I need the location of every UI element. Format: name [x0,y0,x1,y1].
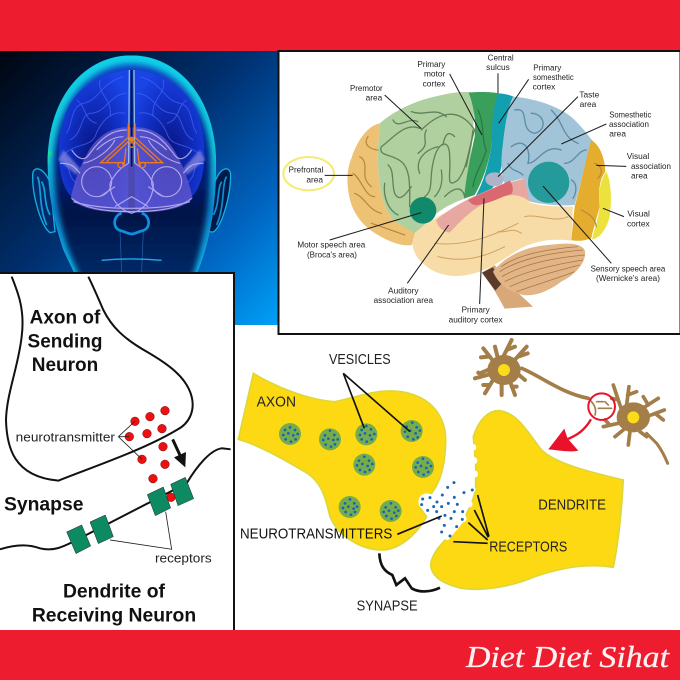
brain labels: Auditory [388,285,419,295]
receptors label and pointers: receptors [155,552,212,566]
nose [115,213,149,234]
brain labels: cortex [423,78,446,88]
yellow highlight ring around prefrontal label [283,157,334,190]
brain labels: cortex [533,81,556,91]
cortical sulci [381,112,475,215]
Wernicke area [528,162,569,203]
neurotransmitter label and pointers: neurotransmitter [16,430,116,445]
receptors label and pointers [110,512,212,566]
brain labels: somesthetic [533,72,574,82]
label: receptors with pointers: RECEPTORS [489,540,567,556]
label: vesicles with pointers [329,352,410,432]
synaptic vesicles [279,420,434,522]
visual association region [571,140,605,241]
brain labels [289,52,671,324]
heading: axon of sending neuron: Axon of [30,307,101,328]
brain labels: (Broca's area) [307,250,357,260]
icon: head silhouette [43,53,220,277]
brain labels: Premotor [350,83,383,93]
brain labels: Somesthetic [609,109,651,119]
icon: left ear [33,169,55,233]
neurotransmitter dots [125,406,175,502]
brain stem and limbic structures [58,127,205,213]
label: vesicles with pointers: VESICLES [329,352,391,368]
auditory association region [436,178,530,233]
brain labels: association [631,161,671,171]
taste area [485,172,504,186]
brain labels: Primary [417,59,446,69]
brain labels: Visual [627,209,650,219]
label: receptors with pointers [453,495,567,556]
receptors [67,477,194,554]
released neurotransmitters [420,481,474,537]
brain labels: area [609,128,626,138]
panel: synapse diagram with axon and dendrite outlines [0,273,234,631]
brain labels: Taste [579,89,600,99]
pointer lines [325,73,626,304]
brain labels: area [366,93,383,103]
dendrite terminal [431,411,623,589]
panel: yellow axon and dendrite synapse illustration [238,340,668,615]
label: dendrite: DENDRITE [538,497,606,513]
somesthetic association region [501,97,592,205]
heading: dendrite of receiving neuron: Dendrite of [63,582,166,603]
prefrontal area region [347,123,415,245]
panel: glowing head x-ray illustration [0,51,278,325]
brain labels: Visual [627,151,649,161]
mouth [102,259,162,260]
central fissure [130,70,132,167]
ventricles in orange [101,123,163,168]
heading: axon of sending neuron [28,307,102,376]
brain labels: auditory cortex [449,314,503,324]
brain labels: area [306,175,323,185]
heading: dendrite of receiving neuron: Receiving Neuron [32,606,196,627]
label: axon: AXON [257,395,296,411]
temporal lobe [413,193,573,276]
premotor area region [378,92,475,233]
heading: dendrite of receiving neuron [32,582,196,627]
icon: right ear [208,169,231,232]
axon outline [6,277,193,481]
visual cortex region [592,172,611,239]
label: neurotransmitters with pointer [240,516,442,542]
brain labels: Central [488,52,514,62]
brand title: Diet Diet Sihat [465,639,670,674]
label: synapse: SYNAPSE [357,599,418,615]
axon terminal [238,373,446,550]
synapse bracket squiggle [379,553,440,591]
arrow: release direction [173,439,186,467]
heading: synapse: Synapse [4,495,84,516]
brain labels: Prefrontal [289,165,323,175]
primary auditory region [468,181,513,205]
brain labels: sulcus [486,62,510,72]
brain labels: Sensory speech area [591,263,666,273]
brain labels: (Wernicke's area) [596,273,660,283]
vesicle contents [282,421,432,520]
white receptor notches [418,444,478,540]
brain labels: area [631,170,648,180]
cerebellum [493,244,585,295]
Broca area [410,197,436,224]
brain labels: area [580,99,597,109]
brain labels: Primary [462,305,490,315]
heading: axon of sending neuron: Neuron [32,355,98,376]
brain labels: association area [374,295,433,305]
heading: axon of sending neuron: Sending [28,331,102,352]
brain labels: Motor speech area [297,240,366,250]
brain labels: cortex [627,218,650,228]
top red banner [0,0,680,51]
bottom red banner [0,630,680,680]
primary somesthetic cortex region [475,93,515,197]
red magnifier circle [588,393,615,420]
brain labels: Primary [533,62,562,72]
arrow: red callout to synapse [548,419,591,451]
brainstem [482,265,533,309]
dendrite outline [0,448,231,549]
neurotransmitter label and pointers [16,421,142,459]
brain labels: motor [424,69,446,79]
brain labels: association [609,119,649,129]
primary motor cortex region [464,92,499,199]
label: neurotransmitters with pointer: NEUROTRANSMITTERS [240,526,393,542]
icon: two connected neurons [475,340,668,463]
panel: labelled brain anatomy [278,51,680,334]
brain cerebrum lobes [59,70,204,210]
